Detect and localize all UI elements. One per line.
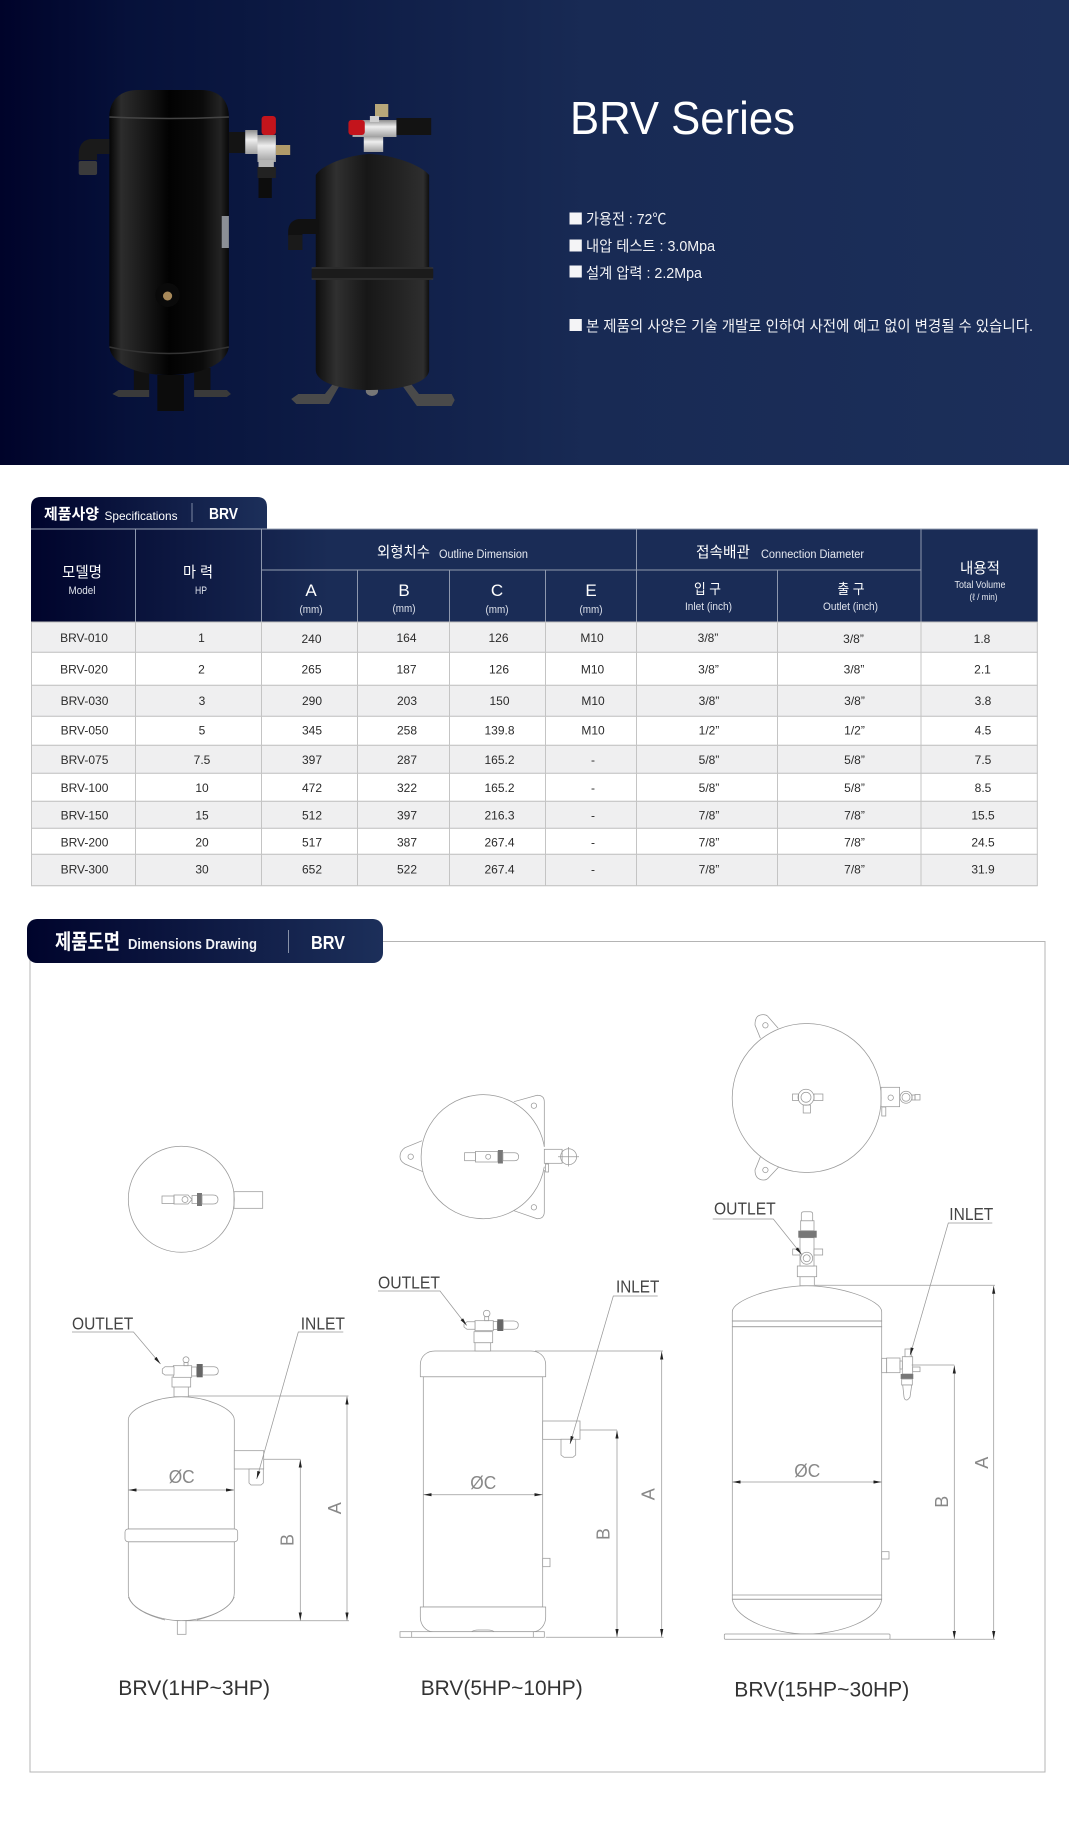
caption: BRV(15HP~30HP) [734,1678,909,1702]
row BRV-300: - [591,862,595,876]
side view: 1HP-3HP [72,1313,349,1700]
row BRV-100: 8.5 [975,781,992,795]
row BRV-100: 10 [195,781,209,795]
hero banner [0,0,1069,465]
row BRV-200: 24.5 [971,835,995,849]
row BRV-075: 7.5 [194,753,211,767]
row BRV-100: 165.2 [484,781,515,795]
row BRV-010: 1.8 [974,632,991,646]
row BRV-020: 2 [198,662,205,676]
tab: dimensions drawing: BRV [311,932,346,953]
callout: outlet: OUTLET [72,1313,134,1333]
spec bullets: 설계 압력 : 2.2Mpa [586,265,703,282]
row BRV-100: BRV-100 [61,781,109,795]
table header: HP [195,585,207,597]
spec bullets: 본 제품의 사양은 기술 개발로 인하여 사전에 예고 없이 변경될 수 있습니다. [586,318,1033,335]
dimension lines: B [278,1534,298,1546]
row BRV-075: - [591,753,595,767]
row BRV-300: 267.4 [484,862,515,876]
row BRV-050 [61,723,992,737]
dimension lines [128,1396,349,1621]
row BRV-050: 345 [302,723,322,737]
row BRV-150: - [591,808,595,822]
tab: dimensions drawing: 제품도면 [55,931,120,954]
row BRV-020: 3/8” [698,662,719,676]
table header: 마 력 [183,564,213,581]
row BRV-150: 216.3 [484,808,515,822]
table header: 모델명 [62,564,102,581]
spec bullets: 내압 테스트 : 3.0Mpa [586,238,716,255]
row BRV-150: 7/8” [699,808,719,822]
row BRV-300: 522 [397,862,417,876]
row BRV-300: BRV-300 [61,862,109,876]
callout: outlet [378,1273,467,1326]
row BRV-030: 150 [489,694,510,708]
table header: C [491,581,503,600]
row BRV-200: 267.4 [484,835,515,849]
dimension lines: B [932,1496,952,1508]
row BRV-150: 7/8” [844,808,865,822]
row BRV-200: 20 [195,835,209,849]
row BRV-010: 126 [488,631,509,645]
row BRV-030: 3/8” [844,694,865,708]
row BRV-020: M10 [581,662,604,676]
row BRV-030: 3 [199,694,206,708]
row BRV-075: 7.5 [975,753,992,767]
title: BRV Series [570,92,795,144]
valve [162,1357,218,1397]
row BRV-010: 1 [198,631,205,645]
tab: specifications: BRV [209,506,239,523]
tab: specifications: Specifications [104,509,178,523]
row BRV-300: 652 [302,862,322,876]
side valve [882,1349,920,1400]
row BRV-030: M10 [581,694,605,708]
row BRV-030: 203 [397,694,417,708]
side view: 5HP-10HP [378,1273,664,1700]
dimension lines: A [325,1502,345,1514]
row BRV-010: BRV-010 [60,631,108,645]
row BRV-100: 322 [397,781,417,795]
side view: 15HP-30HP [713,1199,995,1702]
row BRV-030: BRV-030 [61,694,109,708]
row BRV-010: M10 [580,631,604,645]
table header: (mm) [486,604,508,616]
callout: inlet: INLET [616,1277,660,1297]
row BRV-200: 7/8” [699,835,719,849]
tab: specifications [31,497,267,529]
caption: BRV(5HP~10HP) [421,1676,583,1700]
dimension lines [424,1351,664,1637]
row BRV-050: 1/2” [699,723,719,737]
row BRV-300: 7/8” [699,862,719,876]
specifications table [31,529,1038,886]
row BRV-200: 517 [302,835,322,849]
row BRV-150 [61,808,995,822]
row BRV-050: BRV-050 [61,723,109,737]
dimension lines: A [972,1457,992,1469]
tab: dimensions drawing: Dimensions Drawing [128,937,257,953]
table header: (mm) [580,604,602,616]
caption: BRV(1HP~3HP) [118,1676,270,1700]
dimension lines: A [638,1488,658,1500]
table header: Model [68,585,96,597]
table header: A [305,581,317,600]
callout: outlet [713,1199,802,1254]
row BRV-200: 387 [397,835,417,849]
row BRV-010: 164 [396,631,417,645]
row BRV-150: 512 [302,808,322,822]
top view: 5HP-10HP [400,1095,579,1219]
dimension lines: B [594,1528,614,1540]
row BRV-020: 2.1 [974,662,991,676]
table header: Inlet (inch) [685,601,732,613]
row BRV-150: 397 [397,808,417,822]
row BRV-100: 5/8” [699,781,719,795]
row BRV-300: 30 [195,862,209,876]
row BRV-030 [61,694,992,708]
row BRV-050: 258 [397,723,417,737]
row BRV-020: 126 [489,662,509,676]
row BRV-075: 5/8” [844,753,865,767]
table header: B [398,581,410,600]
product photo: short receiver tank [288,104,455,406]
row BRV-100: - [591,781,595,795]
row BRV-020: BRV-020 [60,662,108,676]
row BRV-030: 3.8 [975,694,992,708]
table header: Outline Dimension [439,549,528,561]
callout: outlet [72,1313,160,1364]
table header [31,529,1038,622]
table header: (mm) [392,603,416,615]
row BRV-050: 4.5 [975,723,992,737]
row BRV-050: 5 [199,723,206,737]
dimension lines: ØC [169,1467,195,1487]
row BRV-020: 3/8” [844,662,864,676]
row BRV-100: 5/8” [844,781,865,795]
spec bullets: 가용전 : 72℃ [586,211,666,228]
row BRV-010: 3/8” [843,632,864,646]
table header: (ℓ / min) [970,592,998,603]
table header: 출 구 [838,581,865,597]
row BRV-020 [60,662,991,676]
table header: 외형치수 [377,544,430,561]
table header: (mm) [300,604,322,616]
row BRV-075: BRV-075 [61,753,109,767]
top view: 1HP-3HP [128,1146,263,1252]
product photo: tall receiver tank [79,90,290,411]
row BRV-200 [61,835,995,849]
row BRV-010: 3/8” [698,631,718,645]
valve [464,1310,518,1351]
dimension lines: ØC [794,1461,820,1481]
table header: E [585,581,597,600]
row BRV-300: 31.9 [971,862,995,876]
callout: inlet: INLET [301,1313,345,1333]
row BRV-010: 240 [301,632,322,646]
panel: dimensions drawing [27,919,1045,1772]
row BRV-050: M10 [581,723,605,737]
row BRV-150: 15.5 [971,808,995,822]
row BRV-075: 5/8” [699,753,719,767]
row BRV-050: 1/2” [844,723,865,737]
callout: inlet [570,1277,660,1444]
row BRV-150: 15 [195,808,209,822]
row BRV-030: 3/8” [699,694,719,708]
row BRV-100: 472 [302,781,322,795]
tab: dimensions drawing [27,919,383,963]
top view: 15HP-30HP [732,1015,920,1180]
table header: Total Volume [954,580,1006,591]
row BRV-100 [61,781,992,795]
row BRV-075: 287 [397,753,417,767]
row BRV-050: 139.8 [484,723,515,737]
spec bullets [570,211,1033,335]
row BRV-150: BRV-150 [61,808,109,822]
table header: 입 구 [694,581,721,597]
row BRV-075: 165.2 [484,753,515,767]
row BRV-030: 290 [302,694,322,708]
row BRV-020: 265 [301,662,322,676]
row BRV-075: 397 [302,753,322,767]
row BRV-200: 7/8” [844,835,865,849]
row BRV-010 [60,631,991,646]
row BRV-020: 187 [396,662,417,676]
callout: outlet: OUTLET [378,1273,440,1293]
callout: inlet [257,1313,345,1479]
tab: specifications: 제품사양 [44,506,99,523]
dimension lines: ØC [470,1473,496,1493]
callout: inlet: INLET [949,1204,994,1224]
row BRV-200: - [591,835,595,849]
row BRV-300 [61,862,995,876]
table header: Connection Diameter [761,549,864,561]
top valve [793,1212,823,1286]
callout: inlet [910,1204,994,1356]
table header: 접속배관 [696,544,750,561]
row BRV-300: 7/8” [844,862,865,876]
row BRV-200: BRV-200 [61,835,109,849]
table header: Outlet (inch) [823,601,878,613]
table header: 내용적 [960,560,1000,577]
callout: outlet: OUTLET [714,1199,776,1219]
dimension lines [732,1285,995,1639]
row BRV-075 [61,753,992,767]
